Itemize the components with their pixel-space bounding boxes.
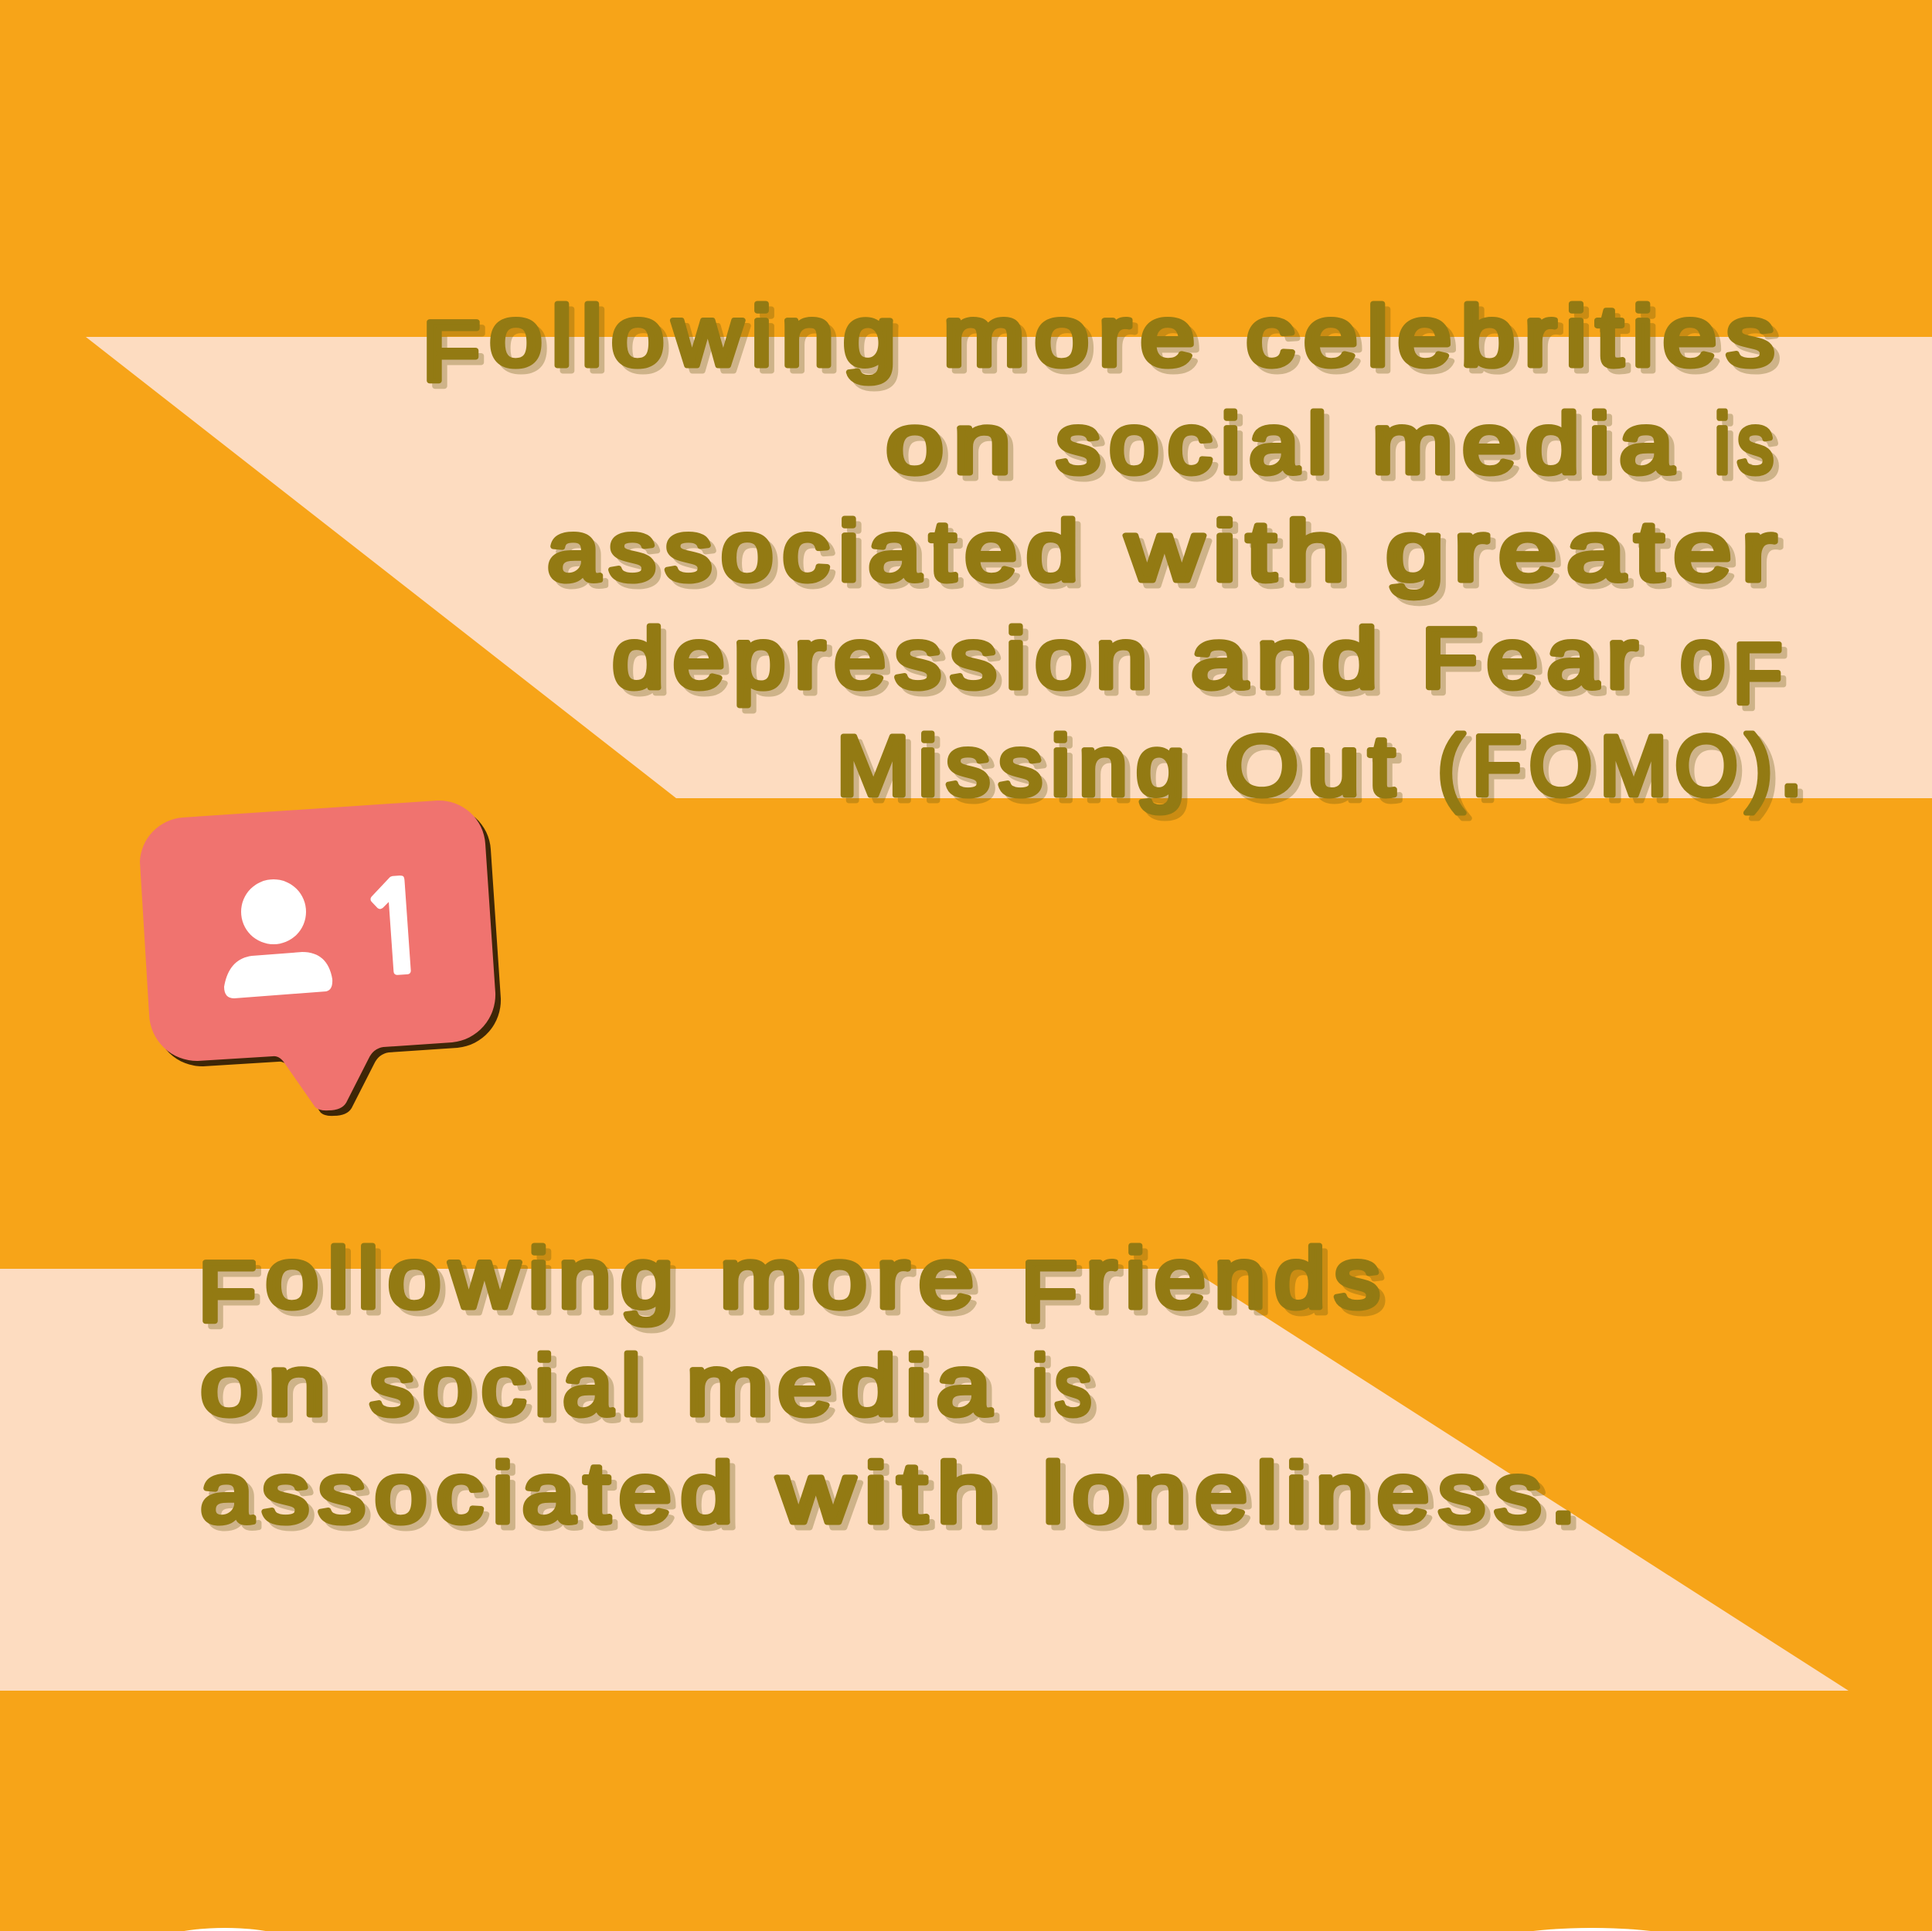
- text block: friends: is: [1032, 1338, 1098, 1433]
- icon: follower notification bubble: [140, 801, 501, 1116]
- text block: friends: social: [369, 1338, 649, 1433]
- text block: celebrities: o: [1680, 611, 1735, 706]
- text block: celebrities: celebrities: [1246, 289, 1784, 384]
- text block: celebrities: F: [422, 304, 489, 399]
- text block: friends: F: [198, 1245, 265, 1340]
- icon: person head: [241, 879, 306, 944]
- follower count: 1: [355, 865, 439, 994]
- text block: friends: on: [200, 1338, 335, 1433]
- text block: celebrities: (FOMO).: [1437, 719, 1810, 814]
- text block: friends: media: [686, 1338, 1000, 1433]
- text block: celebrities: and: [1191, 611, 1387, 706]
- text block: celebrities: more: [943, 289, 1204, 384]
- icon: person body: [224, 952, 332, 998]
- text block: friends: riends: [1086, 1231, 1389, 1326]
- text block: friends: F: [1021, 1245, 1086, 1340]
- panel: bottom banner: [0, 1269, 1849, 1691]
- text block: celebrities: greater: [1386, 504, 1786, 599]
- text block: friends: ollowing: [265, 1231, 682, 1326]
- text block: celebrities: media: [1372, 396, 1682, 491]
- text block: celebrities: social: [1056, 396, 1335, 491]
- text block: friends: loneliness.: [1043, 1446, 1585, 1541]
- text block: friends: more: [719, 1231, 983, 1326]
- text block: friends: with: [777, 1446, 1005, 1541]
- text block: celebrities: ollowing: [489, 289, 905, 384]
- text block: celebrities: F: [1733, 627, 1790, 722]
- text block: celebrities: Missing: [836, 719, 1193, 814]
- text block: celebrities: Out: [1225, 719, 1403, 814]
- text block: celebrities: with: [1125, 504, 1355, 599]
- white blob right at bottom edge: [1484, 1928, 1700, 1931]
- text block: celebrities: associated: [547, 504, 1087, 599]
- text block: celebrities: is: [1714, 396, 1781, 491]
- text block: celebrities: Fear: [1421, 611, 1646, 706]
- text block: celebrities: depression: [612, 611, 1156, 706]
- text block: friends: [198, 1231, 1585, 1541]
- white blob left at bottom edge: [150, 1928, 300, 1931]
- bubble body: [140, 801, 495, 1110]
- panel: top banner: [86, 337, 1932, 798]
- text block: friends: associated: [200, 1446, 742, 1541]
- text block: celebrities: on: [886, 396, 1021, 491]
- text block: celebrities: [422, 289, 1810, 814]
- bubble shadow: [145, 806, 501, 1116]
